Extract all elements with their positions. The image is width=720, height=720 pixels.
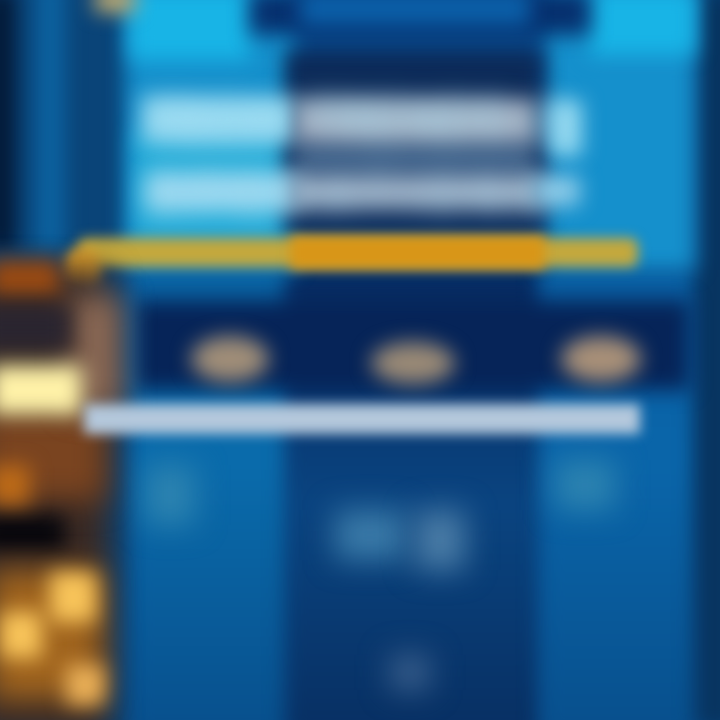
text block 2 [335, 510, 405, 560]
brown top glow [0, 260, 60, 296]
title band centre [295, 100, 535, 142]
banner left end [64, 248, 100, 288]
title band left [143, 98, 293, 142]
white subtitle bar [84, 404, 640, 434]
dark shadow [0, 305, 70, 350]
banner centre [290, 236, 545, 269]
bright light [0, 365, 82, 415]
label 1 [191, 336, 269, 382]
subtitle band right [535, 176, 580, 206]
gold banner [56, 226, 648, 289]
text block 1 [145, 465, 195, 525]
title [126, 80, 596, 228]
title band far right [550, 100, 582, 156]
dark base [0, 270, 110, 720]
label 3 [561, 336, 641, 382]
amber wash [0, 570, 102, 700]
panel: left warm lights [0, 244, 142, 720]
panel: three column labels [178, 322, 654, 398]
orange glow [0, 465, 30, 505]
title line 2: OPERATIONS [147, 167, 558, 219]
brown wash [0, 410, 105, 500]
dark lower shadow [0, 515, 65, 551]
banner bar [78, 238, 638, 267]
gold light 1 [0, 612, 42, 658]
text block 4 [555, 460, 615, 510]
subtitle band centre [290, 176, 540, 208]
text block 3 [415, 510, 465, 570]
subtitle band left [147, 174, 295, 210]
gold light 3 [66, 665, 104, 705]
gold light 2 [50, 572, 96, 622]
tan mid band [70, 295, 122, 410]
label 2 [371, 342, 455, 384]
top-left gold light [95, 0, 135, 12]
title line 1: TECH TRENDS & [143, 91, 565, 149]
text block 5 [390, 655, 430, 690]
panel: lower columns [134, 451, 624, 702]
